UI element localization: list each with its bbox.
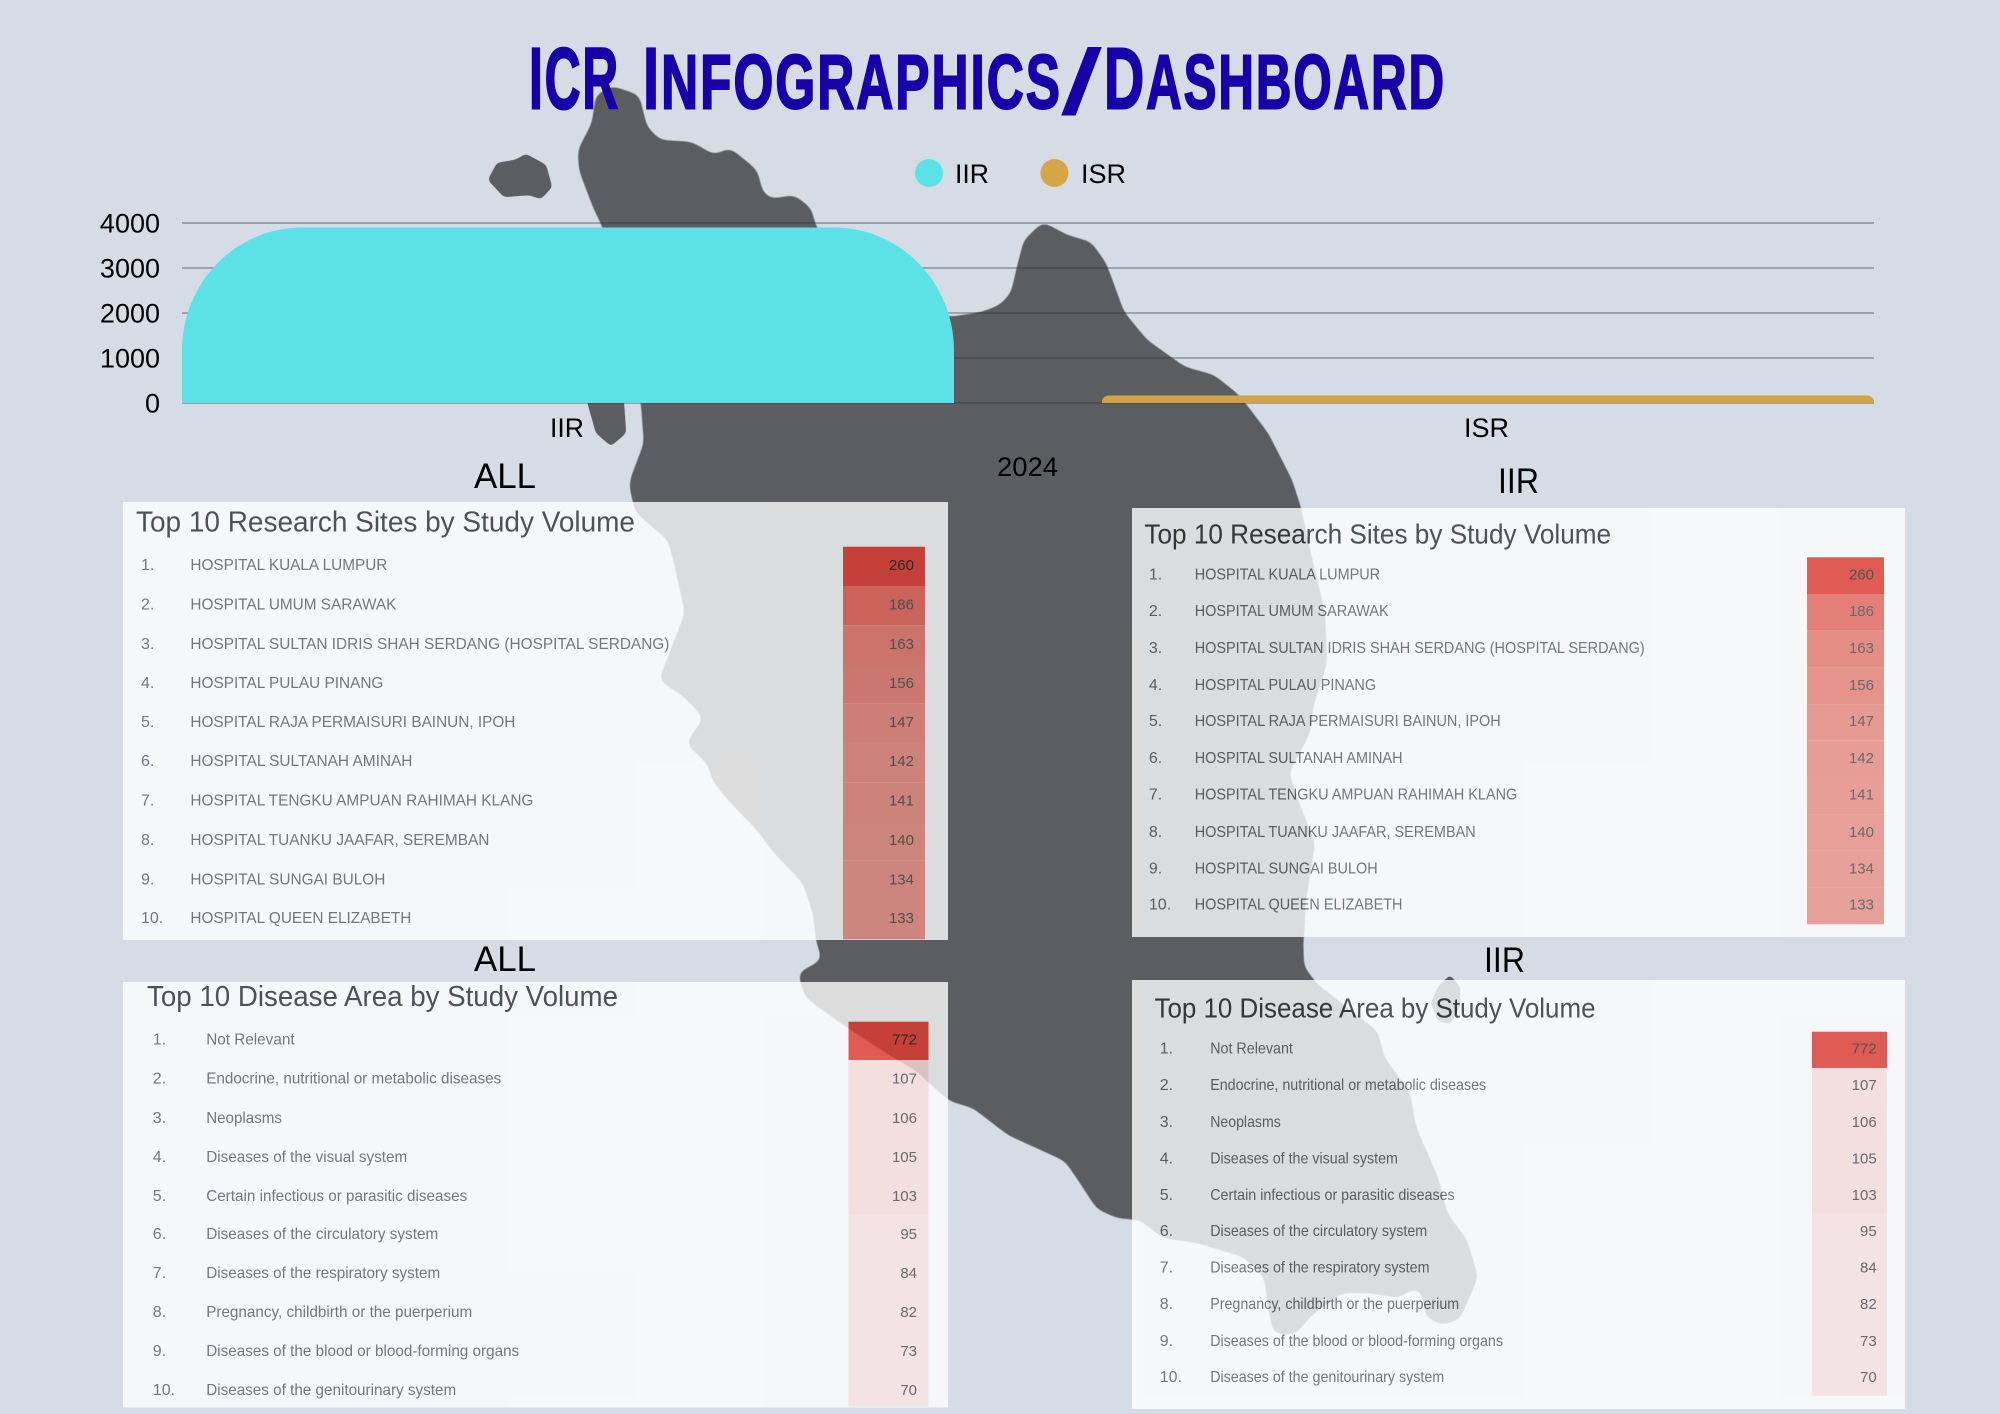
site rows: 163 bbox=[1849, 640, 1874, 657]
site rows: 6. bbox=[141, 753, 154, 770]
site rows: HOSPITAL SULTAN IDRIS SHAH SERDANG (HOSPITAL SERDANG) bbox=[190, 636, 669, 653]
site rows: 147 bbox=[1849, 713, 1874, 730]
site rows: 133 bbox=[889, 910, 914, 927]
disease rows: Not Relevant bbox=[206, 1032, 295, 1048]
disease rows: Certain infectious or parasitic diseases bbox=[206, 1188, 467, 1205]
site rows: 3. bbox=[1149, 640, 1162, 657]
disease rows: 84 bbox=[1860, 1260, 1877, 1276]
panel: IIR top disease areas bbox=[1132, 980, 1905, 1409]
disease rows: 1. bbox=[1160, 1040, 1173, 1058]
panel heading: Top 10 Disease Area by Study Volume bbox=[147, 981, 618, 1013]
site rows: HOSPITAL PULAU PINANG bbox=[190, 675, 383, 692]
disease rows: 73 bbox=[900, 1343, 917, 1360]
disease rows: 6. bbox=[1160, 1223, 1173, 1240]
disease rows: 105 bbox=[1852, 1150, 1877, 1168]
disease rows: Diseases of the circulatory system bbox=[1210, 1223, 1427, 1240]
site rows: 2. bbox=[141, 596, 154, 614]
map silhouette background bbox=[488, 86, 1478, 1334]
site rows: HOSPITAL TENGKU AMPUAN RAHIMAH KLANG bbox=[1195, 786, 1517, 804]
heat column bbox=[1807, 557, 1884, 924]
site rows: 10. bbox=[141, 910, 163, 927]
disease rows: 105 bbox=[892, 1149, 917, 1166]
y axis labels: 1000 bbox=[100, 344, 160, 374]
disease rows: 73 bbox=[1860, 1333, 1877, 1350]
disease rows: Endocrine, nutritional or metabolic diseases bbox=[1210, 1077, 1486, 1094]
disease rows: 95 bbox=[1860, 1223, 1877, 1240]
panel heading: Top 10 Disease Area by Study Volume bbox=[1154, 992, 1596, 1023]
site rows: 142 bbox=[1849, 750, 1874, 767]
disease rows: 95 bbox=[900, 1226, 917, 1243]
site rows: 7. bbox=[141, 792, 154, 810]
disease rows: 2. bbox=[153, 1070, 166, 1088]
site rows: 6. bbox=[1149, 750, 1162, 767]
heading: ALL top: ALL bbox=[474, 457, 536, 496]
disease rows: Not Relevant bbox=[1210, 1040, 1293, 1058]
disease rows: Pregnancy, childbirth or the puerperium bbox=[206, 1304, 472, 1321]
site rows: HOSPITAL SULTANAH AMINAH bbox=[1195, 750, 1402, 767]
panel: IIR top research sites bbox=[1132, 508, 1905, 937]
site rows: HOSPITAL KUALA LUMPUR bbox=[1195, 566, 1380, 584]
site rows bbox=[1149, 566, 1874, 914]
x axis labels: 2024 bbox=[997, 452, 1058, 482]
disease rows: 10. bbox=[153, 1382, 175, 1399]
disease rows: 84 bbox=[900, 1265, 917, 1282]
disease rows: 5. bbox=[1160, 1187, 1173, 1204]
site rows: 260 bbox=[1849, 566, 1874, 584]
site rows: 4. bbox=[141, 675, 154, 692]
disease rows: 70 bbox=[1860, 1369, 1877, 1386]
site rows: HOSPITAL QUEEN ELIZABETH bbox=[190, 910, 411, 927]
site rows: 8. bbox=[141, 832, 154, 849]
site rows: HOSPITAL TENGKU AMPUAN RAHIMAH KLANG bbox=[190, 792, 533, 810]
site rows: HOSPITAL QUEEN ELIZABETH bbox=[1195, 896, 1402, 914]
disease rows: 9. bbox=[1160, 1333, 1173, 1350]
title: INFOGRAPHICS bbox=[643, 30, 1062, 128]
disease rows: 8. bbox=[1160, 1296, 1173, 1313]
panel heading: Top 10 Research Sites by Study Volume bbox=[136, 506, 635, 538]
site rows: 147 bbox=[889, 714, 914, 731]
site rows: 156 bbox=[889, 675, 914, 692]
legend: ISR bbox=[1081, 159, 1126, 189]
y axis labels: 0 bbox=[145, 388, 160, 418]
disease rows: 82 bbox=[1860, 1296, 1877, 1313]
disease rows: 772 bbox=[892, 1032, 917, 1048]
site rows: 10. bbox=[1149, 896, 1171, 914]
y axis labels: 2000 bbox=[100, 298, 160, 328]
site rows: 1. bbox=[141, 557, 154, 574]
heat column bbox=[848, 1022, 928, 1407]
site rows: HOSPITAL SUNGAI BULOH bbox=[190, 872, 385, 888]
site rows: 5. bbox=[141, 714, 154, 731]
disease rows: 5. bbox=[153, 1188, 166, 1205]
disease rows: 772 bbox=[1852, 1040, 1877, 1058]
site rows: 4. bbox=[1149, 677, 1162, 694]
title: DASHBOARD bbox=[1104, 30, 1446, 128]
panel: ALL top research sites bbox=[123, 502, 948, 940]
heading: ALL bottom: ALL bbox=[474, 940, 536, 979]
y axis labels: 3000 bbox=[100, 254, 160, 284]
disease rows: 4. bbox=[153, 1149, 166, 1166]
x axis labels: IIR bbox=[550, 413, 584, 443]
heat column bbox=[1812, 1032, 1887, 1396]
site rows: HOSPITAL TUANKU JAAFAR, SEREMBAN bbox=[1195, 824, 1476, 841]
disease rows bbox=[1160, 1040, 1877, 1386]
site rows: 186 bbox=[1849, 603, 1874, 620]
bar chart: IIR vs ISR bbox=[100, 159, 1874, 482]
disease rows: 106 bbox=[1852, 1114, 1877, 1131]
site rows: 134 bbox=[1849, 860, 1874, 878]
title bbox=[529, 30, 1446, 132]
site rows: 260 bbox=[889, 557, 914, 574]
disease rows: 107 bbox=[892, 1070, 917, 1088]
disease rows: Neoplasms bbox=[206, 1110, 282, 1127]
site rows: 142 bbox=[889, 753, 914, 770]
site rows: HOSPITAL SULTAN IDRIS SHAH SERDANG (HOSPITAL SERDANG) bbox=[1195, 640, 1645, 657]
site rows: 133 bbox=[1849, 896, 1874, 914]
site rows bbox=[141, 557, 914, 927]
legend bbox=[915, 159, 1126, 189]
x axis labels: ISR bbox=[1464, 413, 1509, 443]
disease rows: Diseases of the circulatory system bbox=[206, 1226, 438, 1243]
disease rows: 3. bbox=[1160, 1114, 1173, 1131]
disease rows: Diseases of the genitourinary system bbox=[206, 1382, 456, 1399]
disease rows: 7. bbox=[1160, 1260, 1173, 1276]
disease rows: 70 bbox=[900, 1382, 917, 1399]
disease rows: Diseases of the genitourinary system bbox=[1210, 1369, 1444, 1386]
site rows: 7. bbox=[1149, 786, 1162, 804]
disease rows: 10. bbox=[1160, 1369, 1182, 1386]
disease rows: Endocrine, nutritional or metabolic diseases bbox=[206, 1070, 501, 1088]
site rows: HOSPITAL PULAU PINANG bbox=[1195, 677, 1376, 694]
disease rows: 82 bbox=[900, 1304, 917, 1321]
bar: ISR bbox=[1102, 395, 1874, 403]
site rows: 156 bbox=[1849, 677, 1874, 694]
disease rows: Diseases of the respiratory system bbox=[206, 1265, 440, 1282]
disease rows: 7. bbox=[153, 1265, 166, 1282]
site rows: HOSPITAL KUALA LUMPUR bbox=[190, 557, 387, 574]
disease rows: Diseases of the visual system bbox=[206, 1149, 407, 1166]
site rows: 186 bbox=[889, 596, 914, 614]
site rows: 141 bbox=[889, 792, 914, 810]
site rows: 5. bbox=[1149, 713, 1162, 730]
site rows: HOSPITAL RAJA PERMAISURI BAINUN, IPOH bbox=[190, 714, 515, 731]
disease rows: 8. bbox=[153, 1304, 166, 1321]
disease rows: 106 bbox=[892, 1110, 917, 1127]
site rows: HOSPITAL SUNGAI BULOH bbox=[1195, 860, 1378, 878]
disease rows: 107 bbox=[1852, 1077, 1877, 1094]
disease rows bbox=[153, 1032, 917, 1399]
disease rows: 3. bbox=[153, 1110, 166, 1127]
site rows: HOSPITAL UMUM SARAWAK bbox=[190, 596, 397, 614]
disease rows: 103 bbox=[1852, 1187, 1877, 1204]
site rows: 140 bbox=[889, 832, 914, 849]
disease rows: Neoplasms bbox=[1210, 1114, 1281, 1131]
site rows: 9. bbox=[1149, 860, 1162, 878]
site rows: 134 bbox=[889, 872, 914, 888]
legend: IIR bbox=[955, 159, 989, 189]
site rows: 163 bbox=[889, 636, 914, 653]
site rows: HOSPITAL TUANKU JAAFAR, SEREMBAN bbox=[190, 832, 489, 849]
disease rows: 9. bbox=[153, 1343, 166, 1360]
site rows: 140 bbox=[1849, 824, 1874, 841]
site rows: HOSPITAL SULTANAH AMINAH bbox=[190, 753, 412, 770]
site rows: 2. bbox=[1149, 603, 1162, 620]
heat column bbox=[843, 547, 925, 939]
title: / bbox=[1064, 32, 1099, 132]
disease rows: Diseases of the respiratory system bbox=[1210, 1260, 1430, 1276]
title: ICR bbox=[529, 30, 620, 128]
disease rows: Diseases of the blood or blood-forming organs bbox=[206, 1343, 519, 1360]
y axis labels bbox=[100, 208, 160, 418]
disease rows: 103 bbox=[892, 1188, 917, 1205]
site rows: 9. bbox=[141, 872, 154, 888]
disease rows: 6. bbox=[153, 1226, 166, 1243]
disease rows: Certain infectious or parasitic diseases bbox=[1210, 1187, 1455, 1204]
site rows: 141 bbox=[1849, 786, 1874, 804]
bar: IIR bbox=[182, 228, 954, 403]
site rows: 1. bbox=[1149, 566, 1162, 584]
heading: IIR top: IIR bbox=[1498, 462, 1539, 501]
disease rows: Pregnancy, childbirth or the puerperium bbox=[1210, 1296, 1459, 1313]
disease rows: 4. bbox=[1160, 1150, 1173, 1168]
site rows: 8. bbox=[1149, 824, 1162, 841]
panel: ALL top disease areas bbox=[123, 981, 948, 1408]
panel heading: Top 10 Research Sites by Study Volume bbox=[1144, 518, 1611, 549]
site rows: HOSPITAL UMUM SARAWAK bbox=[1195, 603, 1389, 620]
site rows: HOSPITAL RAJA PERMAISURI BAINUN, IPOH bbox=[1195, 713, 1501, 730]
y axis labels: 4000 bbox=[100, 208, 160, 238]
disease rows: 1. bbox=[153, 1032, 166, 1048]
disease rows: Diseases of the visual system bbox=[1210, 1150, 1398, 1168]
disease rows: 2. bbox=[1160, 1077, 1173, 1094]
disease rows: Diseases of the blood or blood-forming organs bbox=[1210, 1333, 1503, 1350]
x axis labels bbox=[550, 413, 1509, 482]
site rows: 3. bbox=[141, 636, 154, 653]
heading: IIR bottom: IIR bbox=[1484, 941, 1525, 980]
